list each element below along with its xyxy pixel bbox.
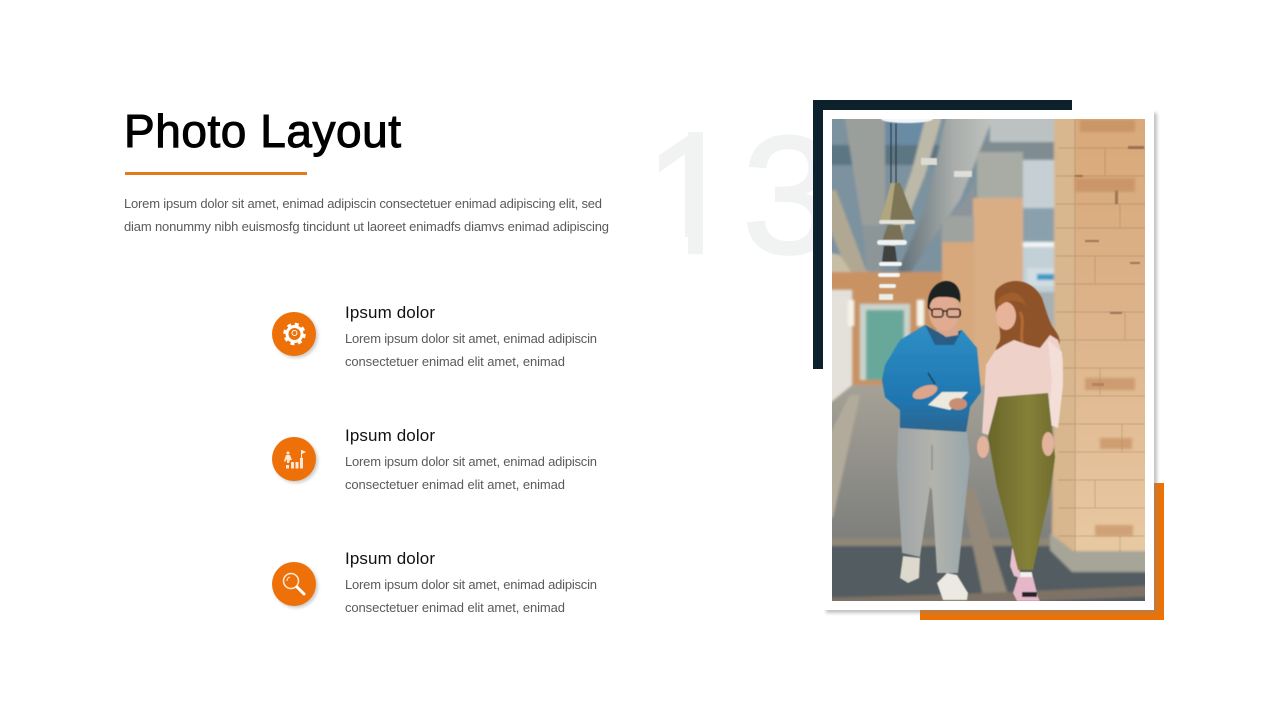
list item 3 [272, 549, 597, 615]
title underline [125, 172, 307, 175]
item 1 text: consectetuer enimad elit amet, enimad [345, 354, 565, 369]
intro text block [124, 196, 609, 234]
item 2 text: Lorem ipsum dolor sit amet, enimad adipiscin [345, 454, 597, 469]
ceiling ducts [844, 119, 886, 226]
woman [977, 281, 1063, 601]
icon: gear with lightbulb [272, 312, 318, 358]
icon: magnifying glass [272, 562, 318, 608]
ceiling [832, 119, 991, 273]
item 3 text [345, 577, 597, 615]
list item 2 [272, 426, 597, 492]
item 3 text: consectetuer enimad elit amet, enimad [345, 600, 565, 615]
item 2 text [345, 454, 597, 492]
item 1 heading: Ipsum dolor [345, 303, 435, 322]
item 2 text: consectetuer enimad elit amet, enimad [345, 477, 565, 492]
list item 1 [272, 303, 597, 369]
item 2 heading: Ipsum dolor [345, 426, 435, 445]
item 1 text: Lorem ipsum dolor sit amet, enimad adipiscin [345, 331, 597, 346]
floor [832, 384, 1054, 540]
item 3 text: Lorem ipsum dolor sit amet, enimad adipiscin [345, 577, 597, 592]
intro text block: Lorem ipsum dolor sit amet, enimad adipiscin consectetuer enimad adipiscing elit, sed [124, 196, 602, 211]
large background number: 13 [644, 101, 835, 289]
icon: steps with flag [272, 437, 318, 483]
brick mortar lines and weathering [1056, 119, 1145, 553]
pendant lamps [877, 115, 972, 300]
right brick column [1074, 119, 1145, 553]
man [882, 281, 981, 600]
corridor door and walls [860, 304, 910, 380]
intro text block: diam nonummy nibh euismosfg tincidunt ut laoreet enimadfs diamvs enimad adipiscing [124, 219, 609, 234]
dark frame accent [813, 100, 1072, 369]
orange frame accent [920, 483, 1164, 620]
photo: two colleagues walking in a corridor [832, 119, 1145, 601]
item 1 text [345, 331, 597, 369]
photo card [815, 100, 1165, 621]
title: Photo Layout [124, 105, 401, 157]
mid pillars [977, 152, 1023, 200]
item 3 heading: Ipsum dolor [345, 549, 435, 568]
